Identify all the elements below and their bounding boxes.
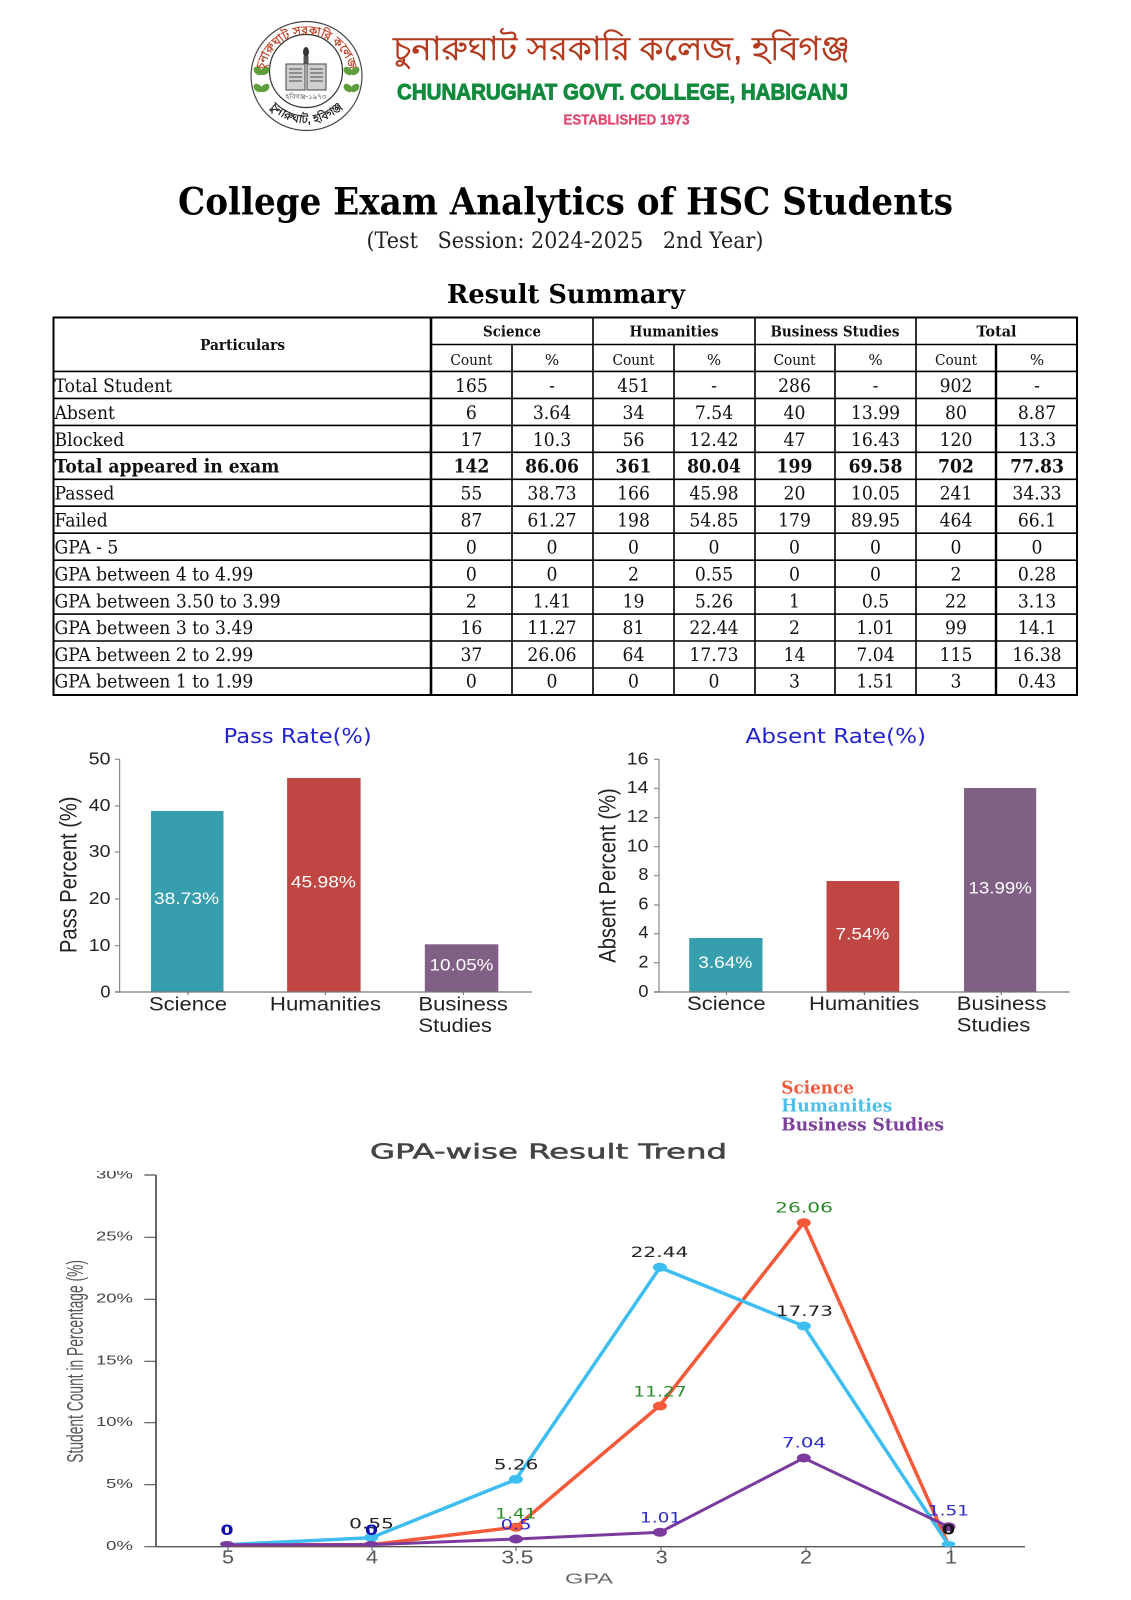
y axis [90,1160,156,1553]
row labels: Total Student [54,375,173,397]
x axis with category labels: Humanities [809,994,919,1015]
total percent column: 34.33 [1012,483,1062,505]
bar: humanities [287,778,361,992]
x axis with category labels: Studies [957,1016,1030,1037]
title: College Exam Analytics of HSC Students [178,180,953,224]
table header: Count [612,351,654,369]
science percent column: 86.06 [525,456,579,478]
x axis: 3.5 [501,1547,533,1567]
y axis: 0% [106,1538,134,1553]
total count column: 22 [945,591,967,613]
business studies count column: 179 [778,510,811,532]
business studies count column [777,375,812,693]
college logo seal: চুনারুঘাট, হবিগঞ্জ [269,102,344,126]
total count column: 0 [951,537,961,559]
science percent column: 61.27 [527,510,577,532]
humanities count column: 451 [617,375,650,397]
row labels [54,375,281,693]
total percent column: 77.83 [1010,456,1064,478]
total percent column: 0 [1032,537,1042,559]
business studies count column: 20 [784,483,805,505]
data labels: 1.41 [495,1506,537,1522]
y axis ticks: 16 [627,749,648,768]
business studies count column: 3 [789,671,800,693]
bar: business studies [425,944,498,992]
total count column: 3 [951,671,961,693]
humanities count column: 198 [617,510,650,532]
humanities percent column: 45.98 [689,483,739,505]
bar chart: pass rate [56,724,532,1037]
y axis: 5% [106,1476,134,1491]
business studies count column: 199 [777,456,812,478]
row labels: GPA between 1 to 1.99 [54,671,253,693]
data labels: 26.06 [775,1201,833,1217]
humanities percent column: 17.73 [689,644,739,666]
y axis ticks: 20 [89,888,110,908]
bar: business studies: 13.99% [968,878,1032,897]
bar: science: 3.64% [698,953,752,972]
bar: humanities [827,881,899,992]
data labels: 0.5 [501,1517,532,1533]
bar: business studies [964,788,1036,992]
business studies count column: 1 [789,591,800,613]
table header: Humanities [630,322,718,340]
data labels: 0.55 [349,1516,394,1532]
x axis with category labels [654,992,1070,1037]
bar: humanities: 7.54% [836,924,889,943]
total count column: 2 [951,564,961,586]
college name in Bengali: চুনারুঘাট সরকারি কলেজ, হবিগঞ্জ [392,28,850,69]
y axis ticks: 10 [89,935,110,955]
science count column: 0 [466,564,477,586]
business studies percent column: 13.99 [851,402,900,424]
y axis ticks: 14 [627,777,648,797]
total count column: 902 [940,375,972,397]
x axis with category labels: Science [149,995,227,1016]
humanities percent column: - [711,375,717,397]
row labels: GPA between 3 to 3.49 [54,617,253,639]
legend: Business Studies [781,1115,944,1136]
science count column [453,375,489,693]
total count column: 120 [940,429,972,451]
bar: humanities: 45.98% [291,873,356,892]
data labels: 22.44 [631,1245,689,1261]
science percent column: 0 [547,671,557,693]
total count column: 80 [945,402,967,424]
college name in English: CHUNARUGHAT GOVT. COLLEGE, HABIGANJ [397,80,848,104]
y axis: 25% [96,1229,134,1244]
science percent column: 3.64 [533,402,571,424]
table header: % [868,351,883,369]
x axis: 4 [366,1547,378,1567]
row labels: GPA between 2 to 2.99 [54,644,253,666]
humanities percent column: 0.55 [695,564,733,586]
data labels: 11.27 [633,1385,687,1401]
bar: science: 38.73% [154,889,219,908]
total percent column: 8.87 [1018,402,1056,424]
business studies percent column: 69.58 [849,456,902,478]
row labels: Absent [54,402,116,424]
humanities percent column: 5.26 [695,591,733,613]
data labels: 1.01 [640,1510,681,1526]
total percent column: - [1034,375,1040,397]
data labels: 5.26 [494,1458,538,1474]
row labels: GPA - 5 [54,537,118,559]
chart title: GPA-wise Result Trend [370,1140,727,1164]
data labels: 17.73 [776,1304,833,1320]
table header: Science [483,322,541,340]
y axis: 20% [96,1291,134,1306]
y axis: 30% [96,1167,134,1182]
y axis: 15% [96,1353,134,1368]
humanities percent column: 0 [709,537,719,559]
science count column: 165 [455,375,488,397]
x axis: GPA [565,1570,613,1587]
humanities percent column: 12.42 [689,429,739,451]
row labels: Passed [54,483,114,505]
y axis title: pass percent: Pass Percent (%) [56,796,83,953]
business studies count column: 2 [789,617,800,639]
x axis with category labels: Humanities [270,995,381,1016]
bar: science [151,811,223,992]
total percent column: 3.13 [1018,591,1056,613]
x axis: 1 [945,1547,957,1567]
section heading: result summary: Result Summary [447,279,687,310]
college logo seal [250,20,363,132]
science count column: 6 [466,402,477,424]
science count column: 142 [453,456,489,478]
total count column [938,375,974,693]
table header: Business Studies [770,322,900,340]
total percent column: 13.3 [1018,429,1056,451]
total count column: 241 [940,483,972,505]
y axis ticks: 12 [627,806,648,826]
bar chart: absent rate [594,724,1070,1037]
y axis ticks: 50 [89,748,110,768]
y axis: 10% [96,1414,134,1429]
total percent column: 14.1 [1018,617,1056,639]
table header: % [707,351,721,369]
legend: Science [781,1077,854,1098]
humanities percent column: 22.44 [689,617,739,639]
x axis: 5 [222,1547,234,1567]
row labels: GPA between 4 to 4.99 [54,564,253,586]
y axis ticks [89,748,120,1001]
business studies count column: 47 [784,429,805,451]
data labels: 1.51 [928,1504,969,1520]
data labels: 7.04 [782,1436,826,1452]
data labels: 0 [365,1523,378,1539]
business studies percent column: 7.04 [856,644,895,666]
x axis: 3 [656,1547,668,1567]
x axis with category labels [115,992,532,1037]
x axis with category labels: Science [687,994,766,1015]
table header: Count [935,351,977,369]
icon: leaves [252,65,361,94]
y axis ticks [627,749,659,1001]
series: science [227,1218,948,1545]
legend: Humanities [781,1096,892,1117]
table header: % [1030,351,1044,369]
y axis ticks: 30 [89,841,110,861]
science percent column: 10.3 [533,429,571,451]
series: humanities [227,1263,955,1547]
founding year inside seal: হবিগঞ্জ-১৯৭৩ [285,93,327,101]
business studies count column: 286 [778,375,811,397]
business studies count column: 14 [784,644,805,666]
science count column: 37 [460,644,482,666]
table header: Count [450,351,492,369]
y axis ticks: 6 [638,894,648,913]
y axis ticks: 40 [89,795,110,815]
x axis [156,1547,1025,1587]
business studies percent column: 1.51 [856,671,895,693]
business studies percent column: - [873,375,878,397]
science percent column: 26.06 [527,644,577,666]
science count column: 16 [460,617,482,639]
chart title: absent rate: Absent Rate(%) [746,724,926,748]
science percent column: 1.41 [533,591,571,613]
y axis ticks: 8 [638,864,648,884]
total count column: 99 [945,617,967,639]
science count column: 2 [466,591,477,613]
row labels: Total appeared in exam [54,456,279,478]
science percent column: 11.27 [527,617,577,639]
science percent column [525,375,579,693]
humanities count column: 34 [623,402,644,424]
college logo seal: চুনারুঘাট সরকারি কলেজ [256,26,357,68]
data labels: 0 [220,1523,234,1539]
science count column: 87 [460,510,482,532]
y axis title: absent percent: Absent Percent (%) [594,788,622,963]
row labels: Failed [54,510,108,532]
humanities count column: 166 [617,483,650,505]
table header: Count [774,351,816,369]
business studies count column: 0 [789,537,800,559]
total percent column: 0.28 [1018,564,1056,586]
humanities percent column: 54.85 [689,510,739,532]
established year: ESTABLISHED 1973 [564,112,690,128]
business studies percent column: 10.05 [851,483,900,505]
x axis with category labels: Business [957,994,1046,1015]
science count column: 17 [460,429,482,451]
humanities percent column: 7.54 [695,402,733,424]
business studies percent column: 0 [870,537,881,559]
business studies count column: 0 [789,564,800,586]
business studies percent column: 89.95 [851,510,900,532]
bar: business studies: 10.05% [429,956,493,975]
humanities percent column [687,375,741,693]
total percent column: 16.38 [1012,644,1062,666]
legend [781,1077,944,1136]
business studies percent column: 0.5 [862,591,889,613]
business studies percent column: 16.43 [851,429,900,451]
humanities count column: 56 [623,429,644,451]
science count column: 55 [460,483,482,505]
y axis ticks: 10 [627,836,648,855]
row labels: Blocked [54,429,124,451]
business studies percent column: 1.01 [856,617,895,639]
line chart: GPA-wise result trend [62,1140,1025,1587]
science percent column: 0 [547,537,557,559]
total count column: 464 [940,510,972,532]
science count column: 0 [466,537,477,559]
bar: science [689,938,762,992]
humanities count column: 361 [616,456,651,478]
x axis with category labels: Studies [418,1016,492,1037]
y axis ticks: 0 [638,981,648,1001]
humanities count column: 81 [623,617,644,639]
y axis ticks: 0 [100,981,110,1001]
total percent column [1010,375,1064,693]
y axis title: Student Count in Percentage (%) [62,1260,88,1463]
total percent column: 66.1 [1018,510,1056,532]
humanities count column [616,375,651,693]
chart title: pass rate: Pass Rate(%) [224,724,372,748]
humanities count column: 2 [628,564,639,586]
row labels: GPA between 3.50 to 3.99 [54,591,281,613]
total percent column: 0.43 [1018,671,1056,693]
series: business studies [220,1454,955,1547]
data labels [220,1201,969,1539]
humanities percent column: 0 [709,671,719,693]
table header: Total [976,322,1017,340]
humanities count column: 64 [623,644,644,666]
icon: open book with flame [286,47,326,90]
result summary table [54,318,1077,695]
table header [200,322,1044,369]
science count column: 0 [466,671,477,693]
humanities percent column: 80.04 [687,456,741,478]
subtitle: (Test Session: 2024-2025 2nd Year) [366,229,764,254]
business studies count column: 40 [784,402,805,424]
science percent column: 0 [547,564,557,586]
x axis: 2 [800,1547,812,1567]
data labels: 0 [942,1522,955,1538]
business studies percent column [849,375,902,693]
humanities count column: 0 [628,537,639,559]
table header: % [545,351,559,369]
total count column: 115 [940,644,972,666]
science percent column: - [549,375,555,397]
business studies percent column: 0 [870,564,881,586]
y axis ticks: 2 [638,952,648,971]
x axis with category labels: Business [418,995,508,1016]
humanities count column: 19 [623,591,644,613]
table header: Particulars [200,336,285,354]
total count column: 702 [938,456,974,478]
science percent column: 38.73 [527,483,577,505]
humanities count column: 0 [628,671,639,693]
y axis ticks: 4 [638,922,648,942]
